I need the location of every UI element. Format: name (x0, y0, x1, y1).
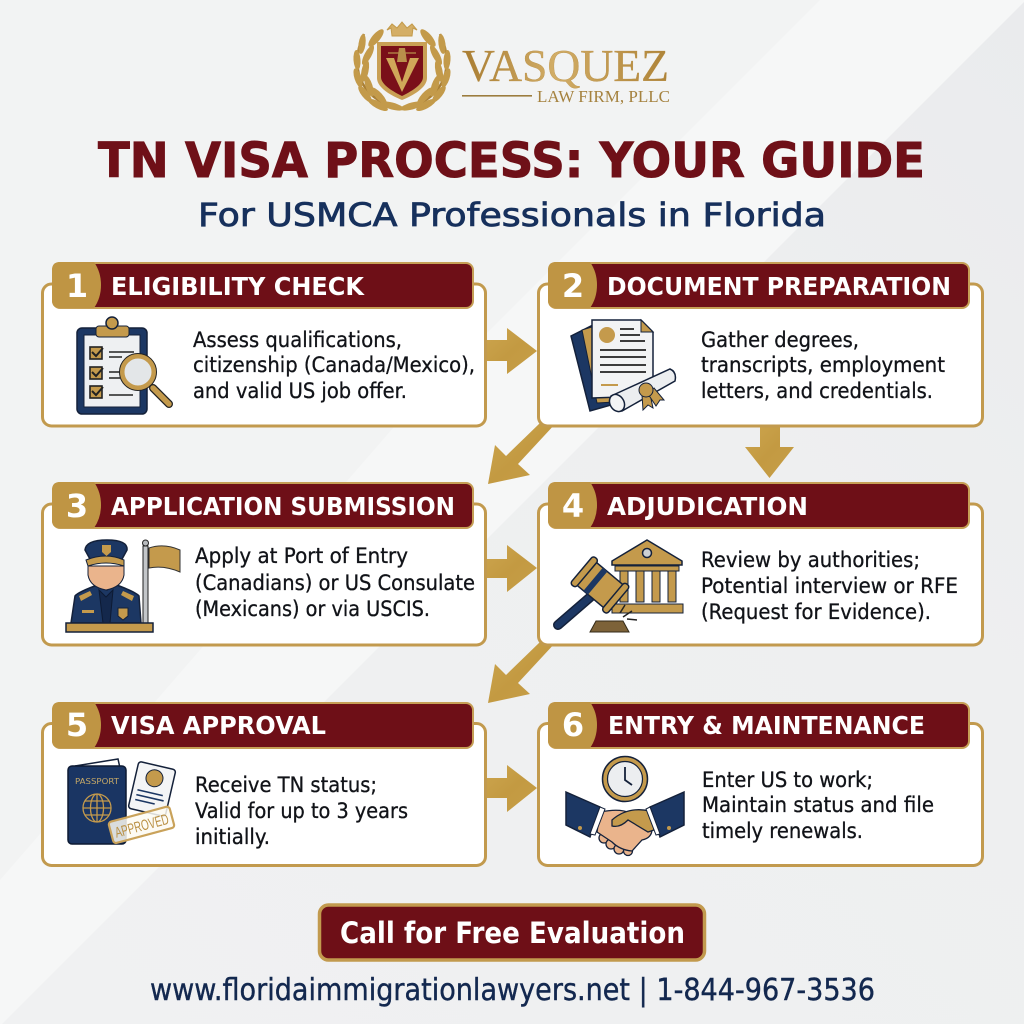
header bar (52, 262, 473, 308)
body text: (Canadians) or US Consulate (195, 571, 475, 595)
arrow: step 4 to step 5 (488, 642, 556, 703)
icon: documents and diploma (571, 320, 675, 414)
logo rule (462, 95, 532, 97)
icon: officer and flag (66, 540, 180, 632)
body text (195, 544, 475, 621)
subtitle: For USMCA Professionals in Florida (198, 196, 826, 234)
body text: citizenship (Canada/Mexico), (193, 353, 475, 377)
logo wreath (352, 27, 452, 113)
arrow: step 5 to step 6 (486, 765, 537, 812)
body text: Potential interview or RFE (701, 574, 958, 598)
body text: timely renewals. (702, 819, 863, 843)
header bar (52, 482, 473, 528)
body text: Valid for up to 3 years (195, 799, 408, 823)
icon: courthouse and gavel (558, 540, 683, 632)
body text (701, 548, 958, 624)
header bar: APPLICATION SUBMISSION (111, 492, 455, 521)
body text: (Request for Evidence). (701, 600, 931, 624)
icon: passport, document and stamp: PASSPORT (75, 777, 119, 786)
header bar: VISA APPROVAL (111, 711, 326, 740)
arrow: step 2 to step 3 (488, 423, 556, 484)
header bar: 2 (562, 267, 584, 305)
header bar (548, 702, 969, 748)
header bar: 4 (562, 487, 584, 525)
icon: passport, document and stamp: APPROVED (113, 811, 171, 842)
panel: step 3 application submission (42, 482, 486, 645)
header bar (52, 702, 473, 748)
arrow: step 2 to step 4 (745, 426, 794, 478)
body text: Enter US to work; (702, 768, 873, 792)
panel: step 1 eligibility check (42, 262, 486, 426)
body text (702, 768, 934, 843)
body text (195, 773, 408, 849)
body text (193, 328, 475, 403)
body text: Receive TN status; (195, 773, 377, 797)
body text: Apply at Port of Entry (195, 544, 408, 568)
body text (701, 328, 945, 403)
body text: initially. (195, 825, 270, 849)
header bar: ADJUDICATION (607, 492, 808, 521)
body text: (Mexicans) or via USCIS. (195, 597, 430, 621)
icon: passport, document and stamp (68, 759, 176, 844)
body text: Assess qualifications, (193, 328, 402, 352)
header bar: 3 (66, 487, 88, 525)
title: TN VISA PROCESS: YOUR GUIDE (98, 133, 925, 189)
header bar: 1 (66, 267, 88, 305)
body text: Gather degrees, (701, 328, 859, 352)
body text: and valid US job offer. (193, 379, 407, 403)
logo shield (377, 42, 427, 100)
panel: step 4 adjudication (538, 482, 982, 645)
icon: clipboard and magnifier (77, 317, 169, 414)
header bar: DOCUMENT PREPARATION (607, 272, 951, 301)
body text: Maintain status and file (702, 793, 934, 817)
body text: transcripts, employment (701, 353, 945, 377)
logo subtitle: LAW FIRM, PLLC (537, 87, 670, 106)
icon: clock and handshake (566, 756, 684, 856)
arrow: step 1 to step 2 (486, 328, 537, 374)
body text: Review by authorities; (701, 548, 920, 572)
header bar: 5 (66, 706, 88, 744)
logo wordmark: VASQUEZ (462, 40, 669, 91)
logo crown (387, 22, 417, 36)
panel: step 6 entry and maintenance (538, 702, 982, 866)
header bar (548, 482, 969, 528)
body text: letters, and credentials. (701, 379, 933, 403)
header bar: ELIGIBILITY CHECK (111, 272, 366, 301)
call to action button: Call for Free Evaluation (340, 916, 685, 950)
header bar (548, 262, 969, 308)
panel: step 2 document preparation (538, 262, 982, 426)
logo (352, 22, 670, 113)
contact line: www.floridaimmigrationlawyers.net | 1-844-967-3536 (150, 973, 875, 1008)
arrow: step 3 to step 4 (486, 545, 537, 592)
call to action button (320, 905, 704, 960)
panel: step 5 visa approval (42, 702, 486, 866)
header bar: ENTRY & MAINTENANCE (608, 711, 925, 740)
header bar: 6 (562, 706, 584, 744)
